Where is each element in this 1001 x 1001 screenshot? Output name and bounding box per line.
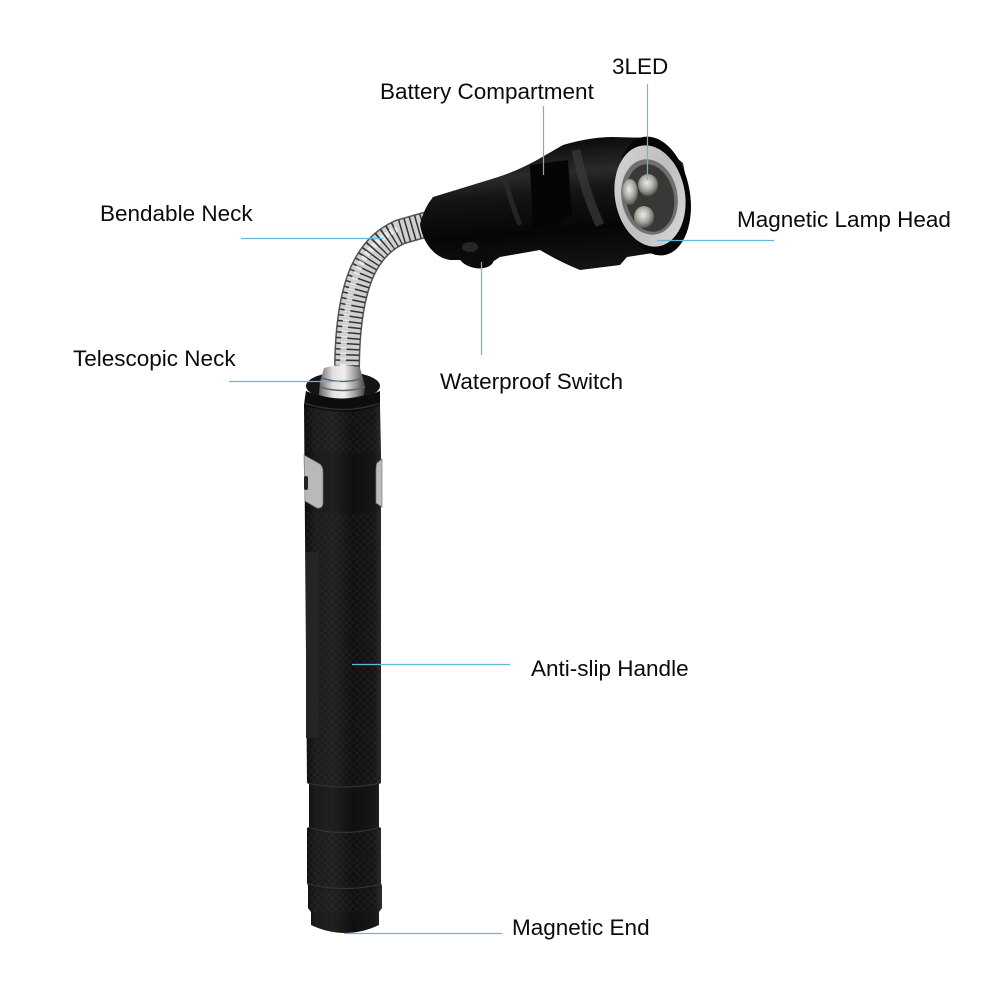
lamp head body	[420, 137, 690, 270]
product diagram	[74, 58, 950, 940]
telescopic neck base	[306, 365, 380, 400]
lens assembly	[607, 131, 700, 261]
collar and rim	[304, 391, 380, 412]
bendable neck	[343, 224, 428, 372]
LED lights	[622, 174, 658, 228]
segment seams	[304, 403, 382, 888]
label: Bendable Neck: Bendable Neck	[100, 201, 253, 226]
head highlights	[505, 150, 600, 225]
leader lines	[229, 84, 774, 934]
label: Magnetic Lamp Head: Magnetic Lamp Head	[737, 207, 951, 232]
flat label strip	[306, 552, 319, 738]
waterproof switch	[456, 242, 496, 272]
left metal clip	[304, 455, 323, 508]
label: Battery Compartment: Battery Compartment	[380, 79, 595, 104]
label: 3LED: 3LED	[612, 54, 668, 79]
label: Magnetic End: Magnetic End	[512, 915, 650, 940]
knurled grip sections	[300, 406, 385, 913]
handle body	[300, 391, 385, 933]
battery compartment	[530, 160, 572, 228]
right metal clip	[376, 459, 382, 507]
label: Telescopic Neck: Telescopic Neck	[73, 346, 236, 371]
flashlight	[300, 131, 700, 933]
label: Waterproof Switch: Waterproof Switch	[440, 369, 623, 394]
label: Anti-slip Handle: Anti-slip Handle	[531, 656, 689, 681]
